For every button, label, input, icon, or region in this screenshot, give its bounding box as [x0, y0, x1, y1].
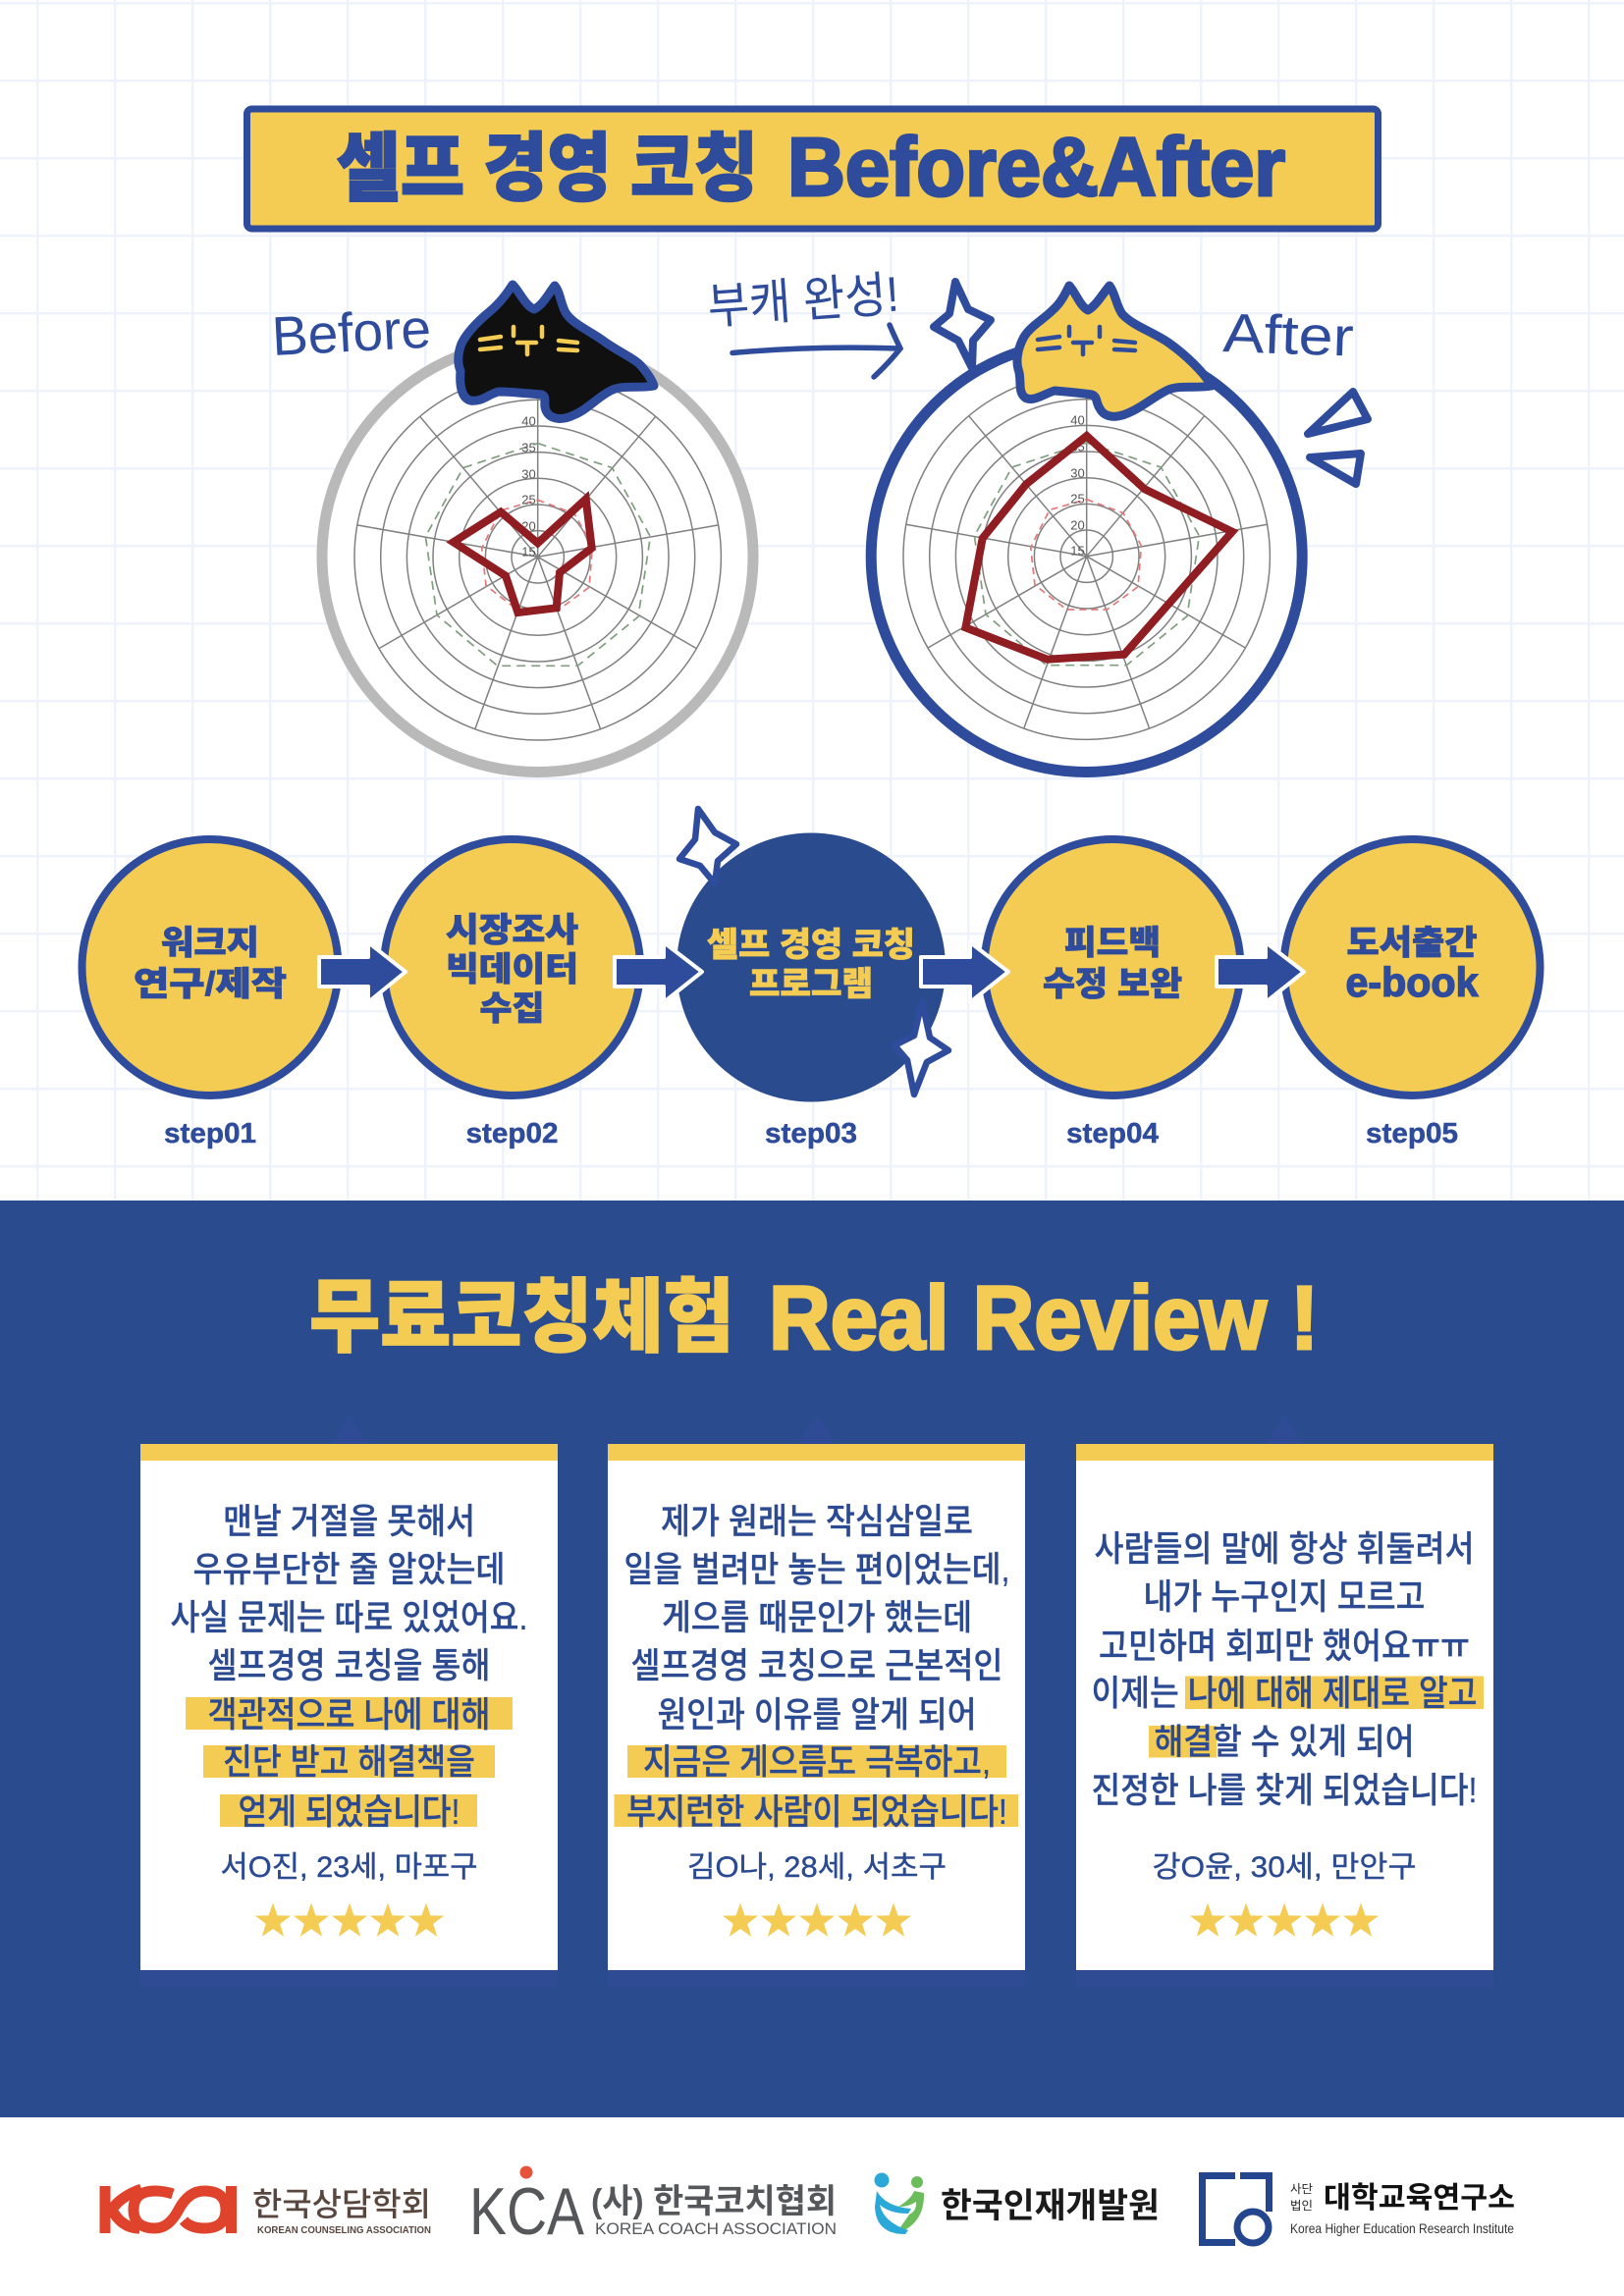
logo: Korean Counseling Association: KOREAN COUNSELING ASSOCIATION — [257, 2225, 431, 2236]
panel: review card 2: 원인과 이유를 알게 되어 — [658, 1694, 976, 1735]
panel: review card 3: 이제는 나에 대해 제대로 알고 — [1092, 1673, 1477, 1713]
panel: review card 2: 부지런한 사람이 되었습니다! — [626, 1791, 1007, 1832]
step 05: step05 — [1366, 1118, 1458, 1149]
step 04: 수정 보완 — [1043, 966, 1182, 1003]
logo: Korea Coach Association: (사) 한국코치협회 — [591, 2183, 837, 2220]
title banner: Before&After — [787, 121, 1285, 213]
panel: review section background — [0, 1201, 1624, 2117]
handwritten label: 부캐 완성: 부캐 완성! — [706, 267, 900, 335]
arrow: before to after — [732, 325, 900, 377]
step 05: 도서출간 — [1347, 925, 1477, 962]
panel: review card 1: 진단 받고 해결책을 — [223, 1741, 475, 1782]
icon: decorative triangles — [1308, 392, 1368, 484]
step 01: step01 — [164, 1118, 256, 1149]
panel: review card 3: 해결할 수 있게 되어 — [1155, 1722, 1414, 1761]
rating stars — [723, 1902, 911, 1937]
panel: review card 3: 진정한 나를 찾게 되었습니다! — [1092, 1770, 1477, 1810]
step 01 — [82, 839, 338, 1149]
step 04: 피드백 — [1064, 925, 1161, 962]
arrow: step 2 to 3 — [615, 942, 702, 1002]
icon: sparkle beside after chart — [934, 282, 991, 368]
panel: review card 2 — [608, 1415, 1025, 1987]
before radar chart: 30 — [521, 466, 536, 481]
step 04: step04 — [1066, 1118, 1159, 1149]
panel: review card 1 — [140, 1415, 558, 1987]
step 03: step03 — [765, 1118, 857, 1149]
icon: yellow cat — [1017, 286, 1212, 416]
before radar chart — [322, 342, 753, 772]
step 02: 시장조사 — [446, 912, 578, 949]
before radar chart: 15 — [521, 544, 536, 559]
step 02: 수집 — [479, 990, 544, 1028]
panel: review card 1: 맨날 거절을 못해서 — [223, 1501, 475, 1541]
step 01: 워크지 — [161, 925, 259, 962]
step 05 — [1284, 839, 1540, 1149]
logo: Korean Counseling Association — [105, 2186, 431, 2236]
after radar chart: 40 — [1070, 413, 1085, 428]
step 03 — [677, 832, 946, 1149]
panel: review card 2: 김O나, 28세, 서초구 — [687, 1851, 947, 1884]
logo: Korea HRD institute: 한국인재개발원 — [941, 2187, 1160, 2225]
step 03: 셀프 경영 코칭 — [707, 927, 915, 964]
panel: review card 3 — [1076, 1415, 1493, 1987]
before radar chart: 40 — [521, 413, 536, 428]
after radar chart: 20 — [1070, 518, 1085, 533]
after radar chart: 35 — [1070, 440, 1085, 454]
panel: review card 1: 우유부단한 줄 알았는데 — [192, 1549, 505, 1589]
arrow: step 4 to 5 — [1217, 942, 1304, 1002]
step 04 — [984, 839, 1241, 1149]
panel: review card 1: 객관적으로 나에 대해 — [208, 1694, 491, 1735]
step 01: 연구/제작 — [134, 966, 287, 1003]
heading: free coaching review: Real Review ! — [769, 1268, 1319, 1368]
logo: Korea Higher Education Research Institute — [1202, 2175, 1515, 2243]
rating stars — [255, 1902, 444, 1937]
before radar chart: 25 — [521, 492, 536, 507]
after radar chart — [871, 342, 1302, 772]
panel: review card 1: 사실 문제는 따로 있었어요. — [171, 1597, 528, 1637]
rating stars — [1190, 1902, 1379, 1937]
step 02: step02 — [465, 1118, 558, 1149]
icon: sparkle top of step 3 — [679, 809, 736, 883]
title banner: 셀프 경영 코칭 — [337, 128, 758, 211]
panel: review card 3: 내가 누구인지 모르고 — [1143, 1576, 1426, 1617]
heading: free coaching review — [309, 1268, 1319, 1368]
logo: Korea Coach Association: KOREA COACH ASSOCIATION — [595, 2219, 837, 2238]
panel: review card 3: 고민하며 회피만 했어요ㅠㅠ — [1099, 1626, 1470, 1666]
before radar chart: 35 — [521, 440, 536, 454]
after radar chart: 15 — [1070, 544, 1085, 559]
step 02: 빅데이터 — [446, 951, 578, 988]
after radar chart: 30 — [1070, 466, 1085, 481]
panel: review card 1: 서O진, 23세, 마포구 — [220, 1851, 477, 1884]
icon: black cat — [459, 285, 654, 418]
panel: review card 2: 일을 벌려만 놓는 편이었는데, — [624, 1549, 1009, 1589]
panel: review card 1: 셀프경영 코칭을 통해 — [208, 1645, 491, 1685]
before radar chart: 20 — [521, 518, 536, 533]
arrow: step 3 to 4 — [921, 942, 1008, 1002]
logo: Korea Higher Education Research Institute: 사단 — [1290, 2182, 1313, 2196]
logo: Korean Counseling Association: 한국상담학회 — [252, 2186, 431, 2222]
logo: Korea Higher Education Research Institute: Korea Higher Education Research Institute — [1290, 2220, 1514, 2236]
panel: review card 2: 셀프경영 코칭으로 근본적인 — [630, 1645, 1003, 1685]
panel: review card 3: 사람들의 말에 항상 휘둘려서 — [1094, 1528, 1475, 1569]
panel: review card 1: 얻게 되었습니다! — [238, 1791, 460, 1832]
after radar chart: 25 — [1070, 492, 1085, 507]
heading: free coaching review: 무료코칭체험 — [309, 1273, 734, 1362]
logo: Korea Higher Education Research Institute: 대학교육연구소 — [1324, 2182, 1515, 2215]
panel: review card 3: 강O윤, 30세, 만안구 — [1153, 1851, 1416, 1884]
logo: Korea Higher Education Research Institute: 법인 — [1290, 2199, 1313, 2213]
logo: Korea Coach Association — [469, 2165, 837, 2249]
panel: review card 2: 게으름 때문인가 했는데 — [662, 1597, 972, 1637]
arrow: step 1 to 2 — [319, 942, 406, 1002]
handwritten label: Before: Before — [270, 297, 432, 367]
panel: review card 2: 지금은 게으름도 극복하고, — [643, 1741, 991, 1782]
title banner — [247, 109, 1379, 229]
step 02 — [384, 839, 640, 1149]
logo: Korea HRD institute — [874, 2173, 1160, 2234]
step 03: 프로그램 — [749, 966, 873, 1003]
step 05: e-book — [1345, 959, 1479, 1005]
handwritten label: After: After — [1222, 301, 1355, 368]
logo: Korea Coach Association: KCA — [469, 2174, 585, 2249]
icon: sparkle bottom of step 3 — [894, 1001, 948, 1095]
panel: review card 2: 제가 원래는 작심삼일로 — [661, 1501, 973, 1541]
